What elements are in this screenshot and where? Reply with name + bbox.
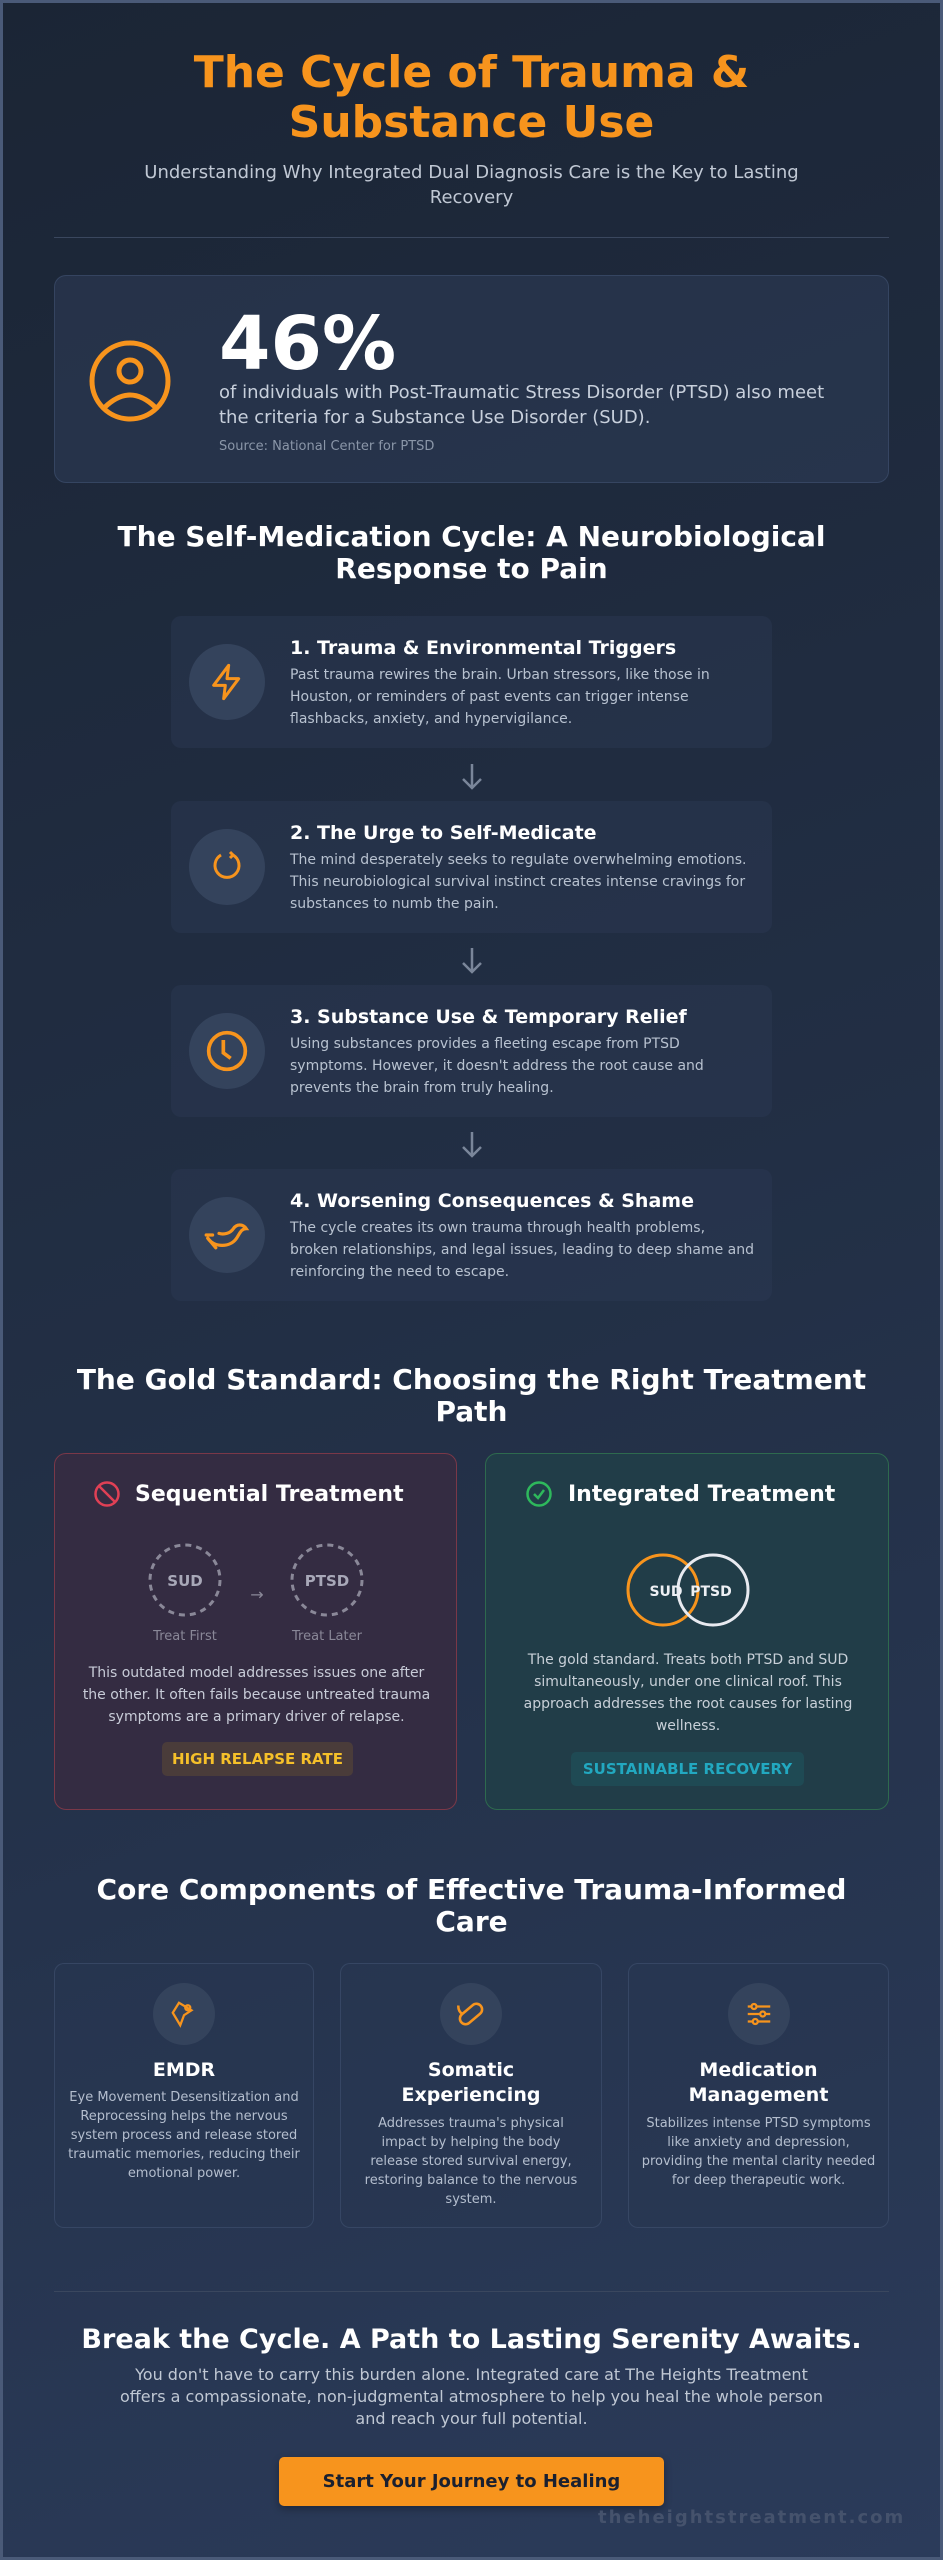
- diagram: sequential: SUD: [167, 1572, 203, 1590]
- badge: [571, 1752, 804, 1786]
- description: The gold standard. Treats both PTSD and SUD simultaneously, under one clinical roof. This approach addresses the root causes for lasting wellness.: [524, 1652, 852, 1734]
- description: This outdated model addresses issues one after the other. It often fails because untreated trauma symptoms are a primary driver of relapse.: [83, 1665, 430, 1725]
- component: medication: Stabilizes intense PTSD symptoms like anxiety and depression, providing the mental clarity needed for deep therapeutic work.: [642, 2116, 875, 2188]
- panel: sequential treatment: [54, 1453, 457, 1810]
- CTA button: [279, 2457, 664, 2506]
- diagram: sequential: Treat Later: [291, 1629, 363, 1644]
- diagram: sequential: Treat First: [152, 1629, 217, 1644]
- step 3: [171, 985, 772, 1117]
- icon: person: [90, 340, 170, 422]
- icon: pill: [440, 1983, 502, 2045]
- diagram: venn: [626, 1554, 750, 1626]
- arrow: [462, 1132, 482, 1158]
- step 4: [171, 1169, 772, 1301]
- diagram: venn: PTSD: [690, 1584, 732, 1600]
- stat number: 46%: [219, 301, 396, 387]
- component: somatic: Experiencing: [402, 2084, 540, 2106]
- icon: bird: [189, 1197, 265, 1273]
- icon: check: [526, 1481, 552, 1507]
- heading: Sequential Treatment: [135, 1482, 404, 1507]
- diagram: sequential: PTSD: [305, 1572, 349, 1590]
- step 3: 3. Substance Use & Temporary Relief: [290, 1006, 687, 1028]
- component: somatic: Somatic: [428, 2059, 514, 2081]
- title: [194, 47, 749, 148]
- step 2: 2. The Urge to Self-Medicate: [290, 822, 597, 844]
- step 1: [171, 616, 772, 748]
- heading: Integrated Treatment: [568, 1482, 835, 1507]
- step 1: Past trauma rewires the brain. Urban stressors, like those in Houston, or reminders of past events can trigger intense flashbacks, anxiety, and hypervigilance.: [290, 667, 710, 727]
- component: somatic: [340, 1963, 602, 2228]
- panel: integrated treatment: [485, 1453, 889, 1810]
- component: EMDR: EMDR: [153, 2059, 215, 2081]
- CTA text: You don't have to carry this burden alone. Integrated care at The Heights Treatment offers a compassionate, non-judgmental atmosphere to help you heal the whole person and reach your full potential.: [120, 2365, 823, 2428]
- step 3: Using substances provides a fleeting escape from PTSD symptoms. However, it doesn't address the root cause and prevents the brain from truly healing.: [290, 1036, 704, 1096]
- diagram: sequential: [148, 1544, 364, 1644]
- icon: clock: [189, 1013, 265, 1089]
- CTA button: Start Your Journey to Healing: [323, 2471, 620, 2492]
- watermark: theheightstreatment.com: [598, 2507, 905, 2528]
- arrow: [462, 948, 482, 974]
- component: EMDR: [54, 1963, 314, 2228]
- diagram: sequential: →: [250, 1585, 264, 1604]
- step 2: The mind desperately seeks to regulate overwhelming emotions. This neurobiological survival instinct creates intense cravings for substances to numb the pain.: [290, 852, 746, 912]
- CTA heading: Break the Cycle. A Path to Lasting Serenity Awaits.: [81, 2324, 862, 2355]
- heading: self-medication cycle: The Self-Medication Cycle: A Neurobiological Response to Pain: [118, 520, 825, 585]
- icon: eye-movement: [153, 1983, 215, 2045]
- component: medication: Medication: [699, 2059, 818, 2081]
- badge: HIGH RELAPSE RATE: [172, 1750, 343, 1768]
- diagram: venn: SUD: [649, 1584, 683, 1600]
- step 1: 1. Trauma & Environmental Triggers: [290, 637, 676, 659]
- panel: stat card: [54, 275, 889, 483]
- arrow: [462, 764, 482, 790]
- icon: prohibited: [94, 1481, 120, 1507]
- icon: sliders: [728, 1983, 790, 2045]
- component: medication: [628, 1963, 889, 2228]
- heading: core components: Core Components of Effective Trauma-Informed Care: [97, 1873, 846, 1938]
- title: The Cycle of Trauma &: [194, 47, 749, 98]
- step 4: 4. Worsening Consequences & Shame: [290, 1190, 694, 1212]
- heading: gold standard: The Gold Standard: Choosing the Right Treatment Path: [77, 1363, 866, 1428]
- icon: lightning: [189, 644, 265, 720]
- step 2: [171, 801, 772, 933]
- icon: cycle: [189, 829, 265, 905]
- badge: [162, 1742, 353, 1776]
- subtitle: Understanding Why Integrated Dual Diagnosis Care is the Key to Lasting Recovery: [144, 162, 799, 208]
- component: somatic: Addresses trauma's physical impact by helping the body release stored survival energy, restoring balance to the nervous system.: [365, 2116, 577, 2207]
- stat description: of individuals with Post-Traumatic Stress Disorder (PTSD) also meet the criteria for a Substance Use Disorder (SUD).: [219, 382, 824, 428]
- component: medication: Management: [689, 2084, 828, 2106]
- source: Source: National Center for PTSD: [219, 439, 434, 454]
- title: Substance Use: [289, 97, 654, 148]
- badge: SUSTAINABLE RECOVERY: [583, 1760, 792, 1778]
- component: EMDR: Eye Movement Desensitization and Reprocessing helps the nervous system process and release stored traumatic memories, reducing their emotional power.: [68, 2090, 300, 2181]
- step 4: The cycle creates its own trauma through health problems, broken relationships, and legal issues, leading to deep shame and reinforcing the need to escape.: [290, 1220, 754, 1280]
